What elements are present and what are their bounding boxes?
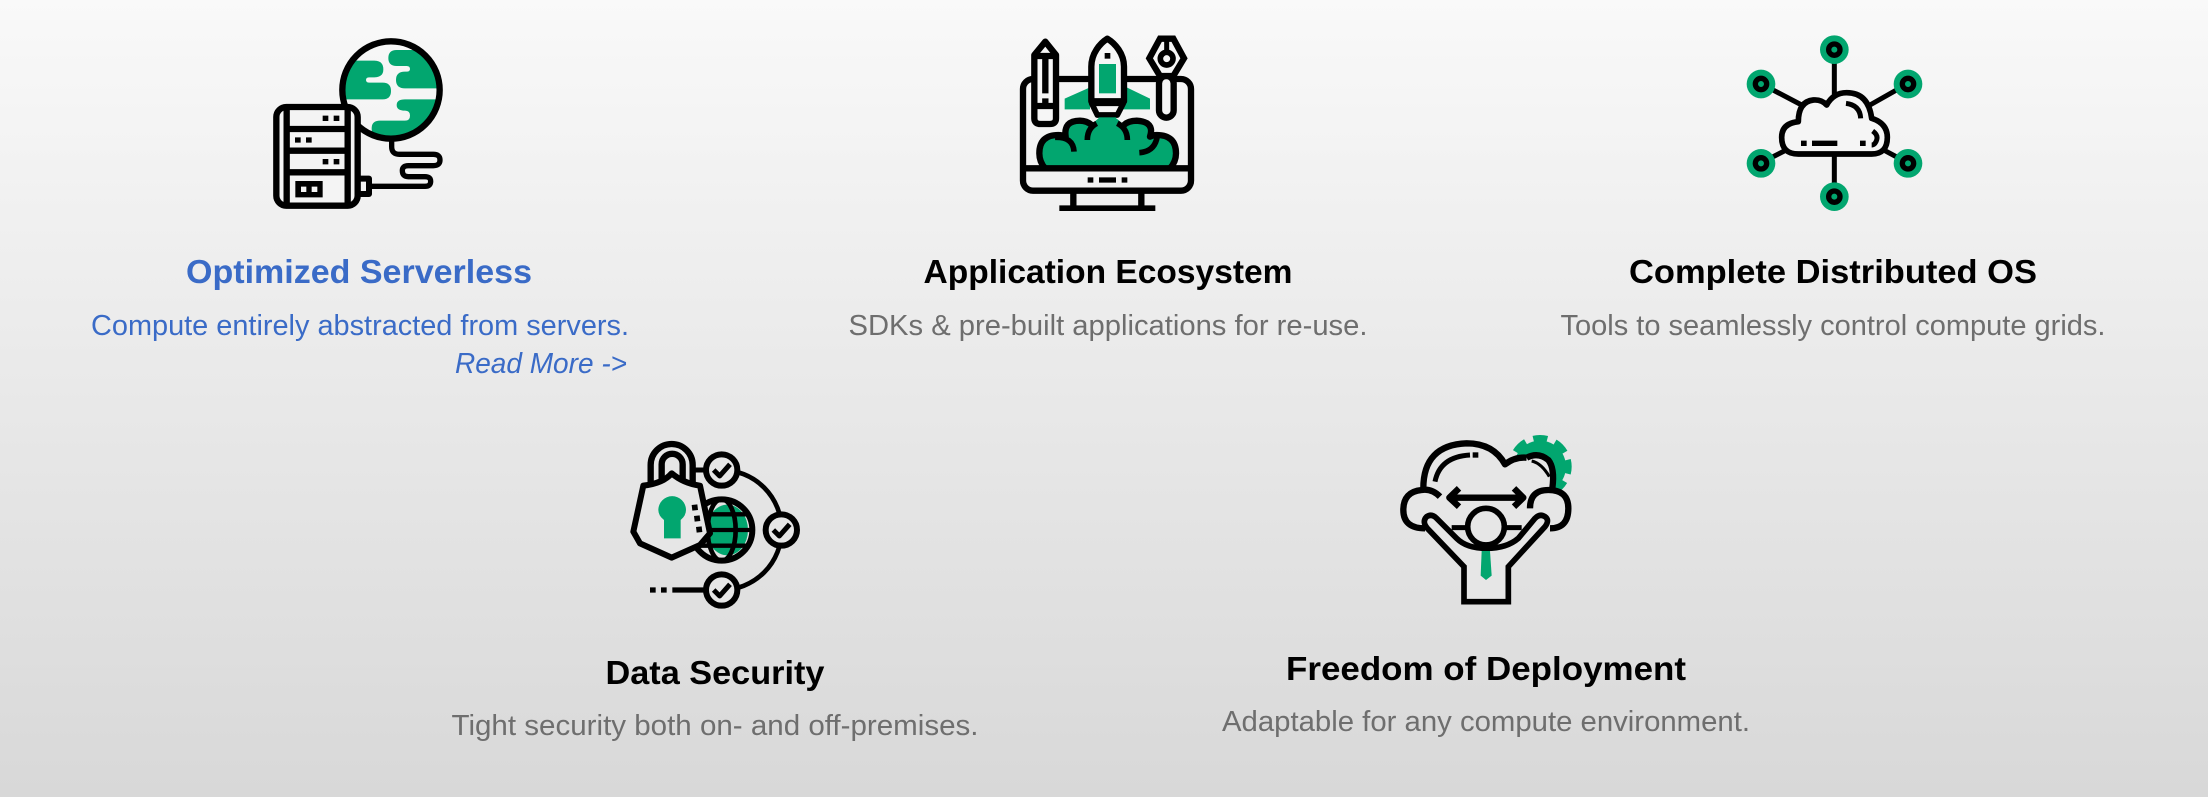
heading: Freedom of Deployment [1286,650,1686,687]
panel: Optimized Serverless [91,41,629,380]
panel: Complete Distributed OS [1560,35,2106,342]
heading: Optimized Serverless [186,253,532,290]
description: Compute entirely abstracted from servers. [91,310,629,342]
description: Tight security both on- and off-premises. [452,710,978,742]
panel: Application Ecosystem [848,39,1368,342]
icon: person holding cloud [1403,432,1574,602]
panel: Data Security [452,444,978,742]
heading: Application Ecosystem [924,253,1292,290]
heading: Data Security [606,654,825,691]
heading: Complete Distributed OS [1629,253,2037,290]
icon: padlock and globe [633,444,797,606]
icon: cloud network [1747,35,1922,211]
icon: monitor with rocket [1023,39,1191,211]
icon: server and globe [276,41,440,206]
link: read more: Read More -> [455,348,627,380]
description: Tools to seamlessly control compute grids. [1560,310,2106,342]
description: Adaptable for any compute environment. [1222,706,1750,738]
panel: Freedom of Deployment [1222,432,1750,738]
description: SDKs & pre-built applications for re-use. [848,310,1368,342]
